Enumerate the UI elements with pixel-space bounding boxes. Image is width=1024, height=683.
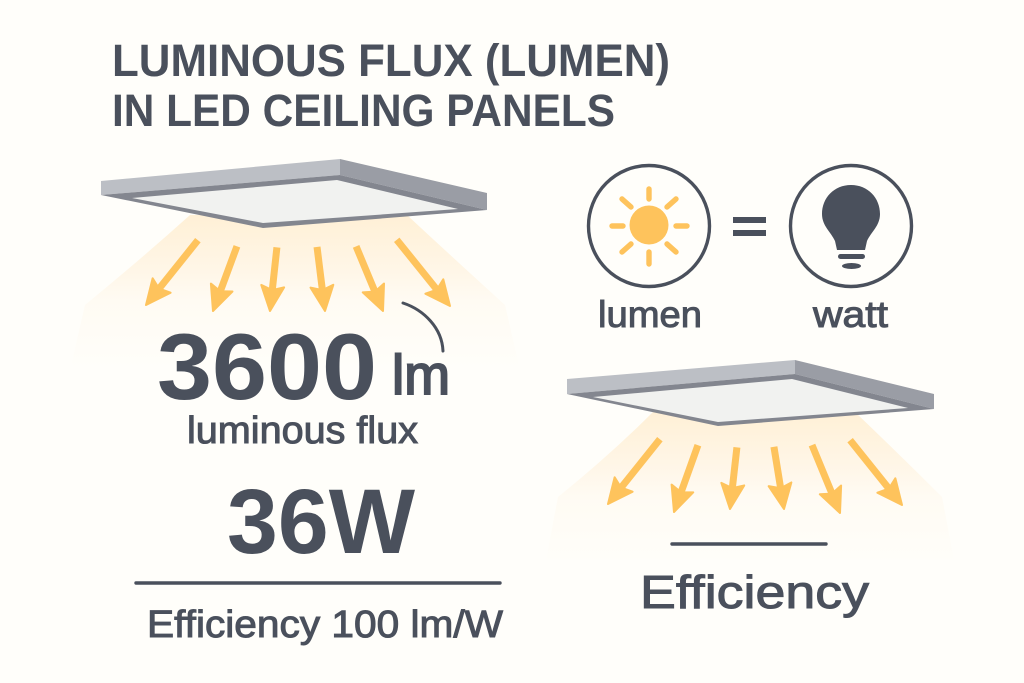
light glow: right panel bbox=[545, 412, 955, 565]
ceiling panel: left bbox=[101, 159, 487, 228]
value: 3600 lm: 3600 bbox=[157, 314, 377, 419]
title bbox=[112, 35, 670, 136]
label: Efficiency: Efficiency bbox=[640, 566, 869, 618]
label: luminous flux: luminous flux bbox=[187, 410, 418, 452]
efficiency value: Efficiency 100 lm/W bbox=[147, 604, 503, 646]
light arrows: right panel bbox=[599, 432, 911, 517]
title: IN LED CEILING PANELS bbox=[112, 85, 615, 136]
light glow: left panel bbox=[70, 215, 520, 370]
ceiling panel: right bbox=[567, 360, 934, 426]
curved pointer to lm bbox=[403, 303, 443, 351]
light arrows: left panel bbox=[137, 233, 459, 315]
divider: right bbox=[672, 542, 826, 546]
title: LUMINOUS FLUX (LUMEN) bbox=[112, 35, 670, 86]
equals sign bbox=[733, 217, 766, 236]
icon: light bulb in circle bbox=[790, 166, 912, 286]
label: watt: watt bbox=[812, 294, 889, 335]
icon: sun in circle bbox=[588, 166, 710, 286]
value: 36W: 36W bbox=[227, 471, 415, 573]
value: 3600 lm: lm bbox=[392, 343, 450, 406]
label: lumen: lumen bbox=[598, 294, 702, 335]
divider bbox=[136, 581, 500, 585]
